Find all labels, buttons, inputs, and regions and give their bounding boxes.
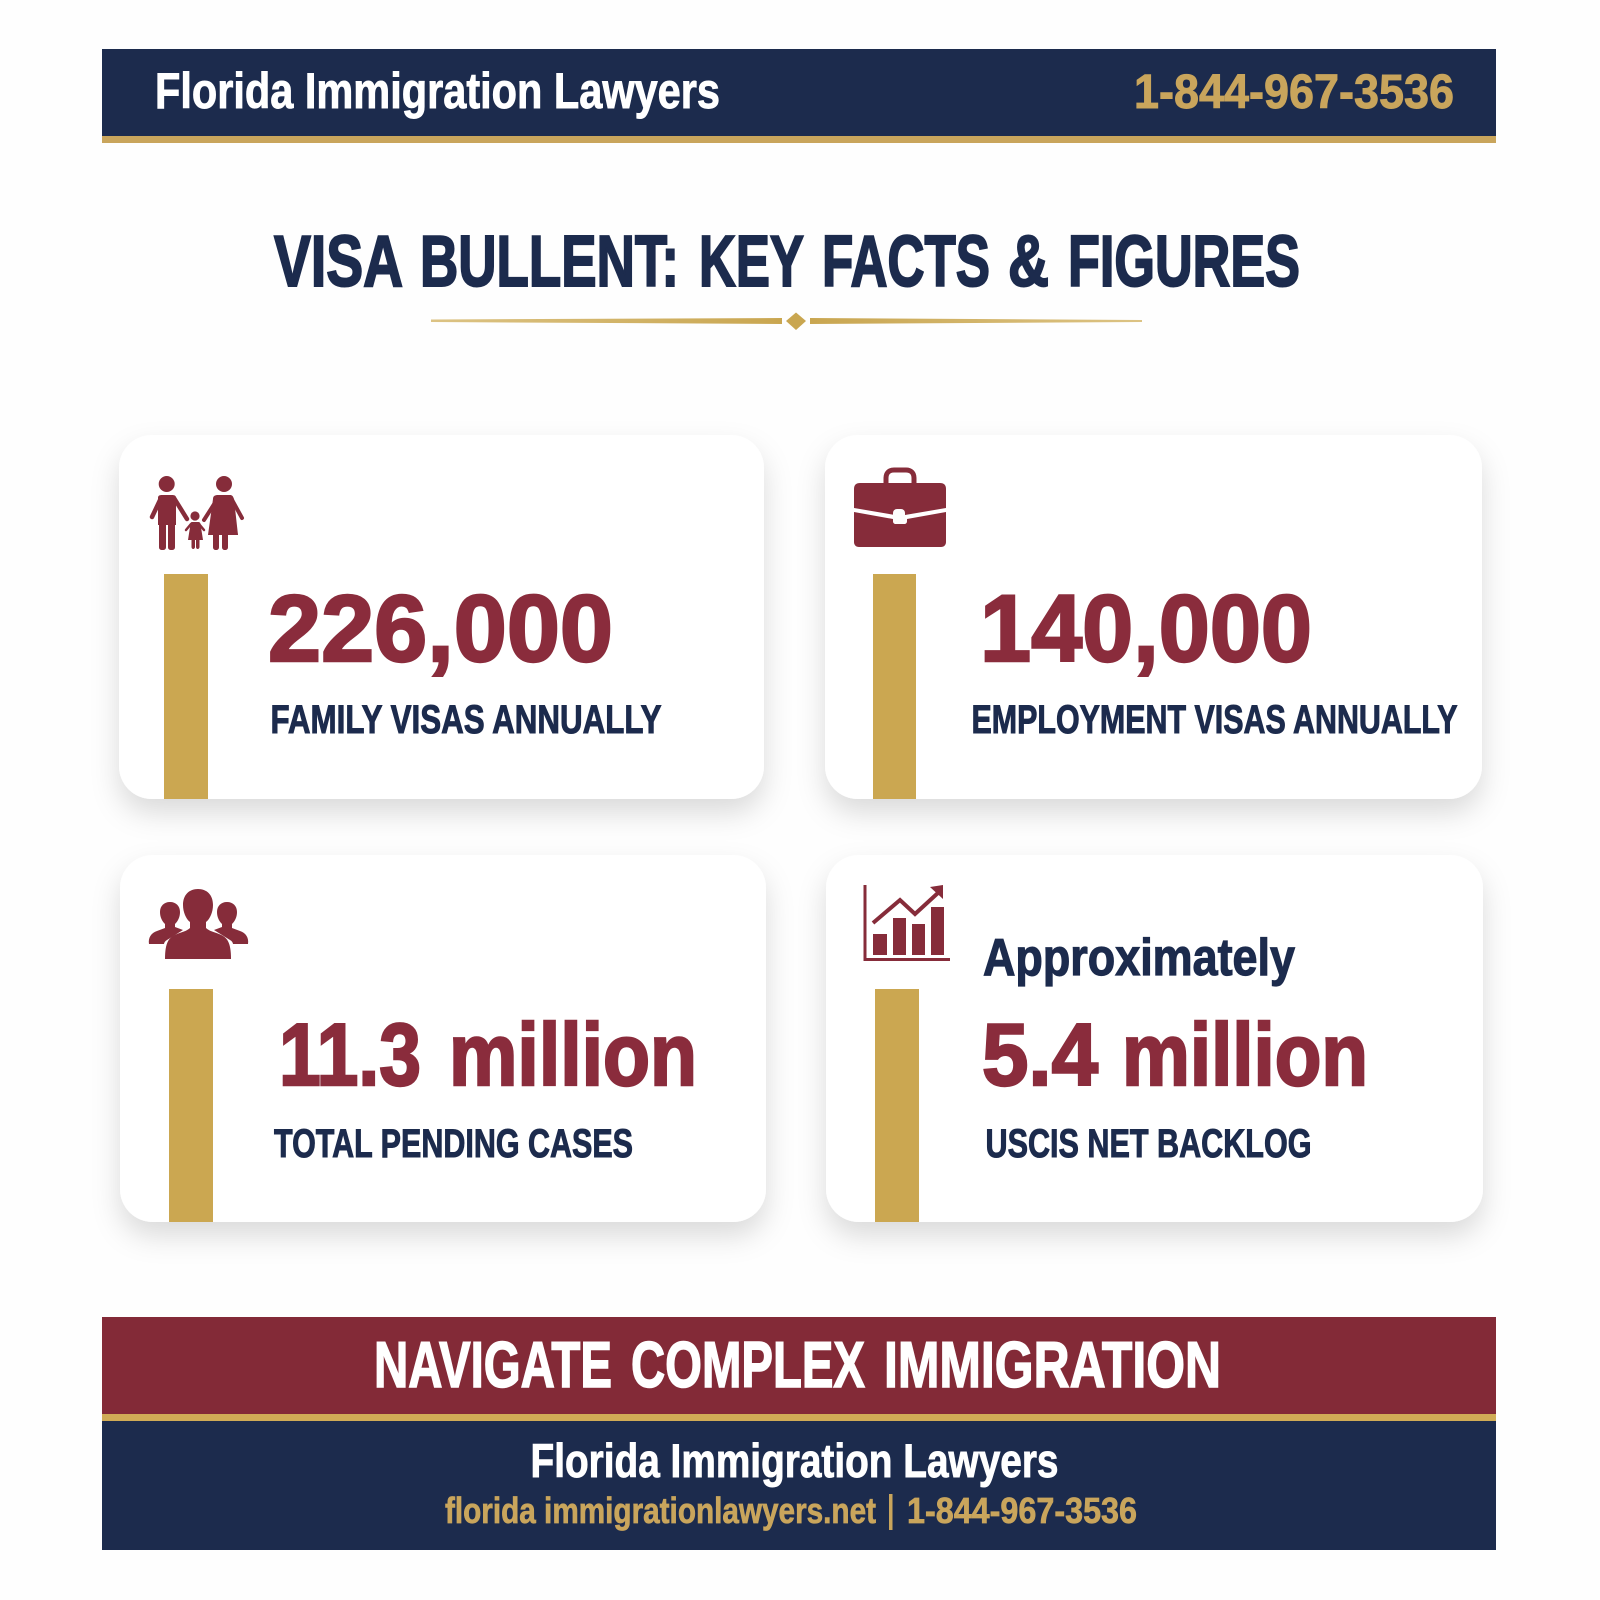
panel: total pending cases bbox=[120, 855, 766, 1222]
icon: family bbox=[152, 476, 242, 550]
card background bbox=[825, 435, 1482, 799]
banner text: IMMIGRATION bbox=[884, 1328, 1221, 1401]
footer gold stripe bbox=[102, 1414, 1496, 1421]
label: uscis net backlog: USCIS NET BACKLOG bbox=[986, 1122, 1312, 1166]
panel: family visas bbox=[119, 435, 764, 799]
header bar bbox=[102, 49, 1496, 143]
title: VISA bbox=[274, 222, 402, 302]
title: BULLENT: bbox=[420, 222, 679, 302]
card background bbox=[120, 855, 766, 1222]
gold accent bar bbox=[169, 989, 213, 1222]
panel: employment visas bbox=[825, 435, 1482, 799]
footer firm name: Florida Immigration Lawyers bbox=[530, 1434, 1058, 1487]
header firm name: Florida Immigration Lawyers bbox=[155, 63, 720, 119]
banner text: NAVIGATE bbox=[374, 1328, 612, 1401]
card background bbox=[119, 435, 764, 799]
qualifier: approximately: Approximately bbox=[983, 929, 1295, 987]
gold accent bar bbox=[875, 989, 919, 1222]
icon: rising bar chart bbox=[865, 885, 950, 960]
card background bbox=[826, 855, 1483, 1222]
stat: 226,000: 226,000 bbox=[268, 576, 613, 682]
stat: 11.3 million: 11.3 bbox=[279, 1005, 421, 1104]
label: total pending cases: TOTAL PENDING CASES bbox=[274, 1122, 633, 1166]
header phone number: 1-844-967-3536 bbox=[1134, 66, 1454, 119]
icon: group of people bbox=[149, 889, 248, 959]
stat: 11.3 million: million bbox=[449, 1005, 697, 1104]
gold accent bar bbox=[164, 574, 208, 799]
title divider with diamond bbox=[431, 312, 1142, 330]
label: employment visas annually: EMPLOYMENT VISAS ANNUALLY bbox=[972, 698, 1458, 742]
label: family visas annually: FAMILY VISAS ANNUALLY bbox=[270, 698, 662, 742]
footer website: florida immigrationlawyers.net bbox=[445, 1490, 876, 1531]
stat: 5.4 million: million bbox=[1122, 1005, 1368, 1104]
panel: uscis net backlog bbox=[826, 855, 1483, 1222]
title: FACTS bbox=[822, 222, 990, 302]
banner text: COMPLEX bbox=[631, 1328, 865, 1401]
footer separator bbox=[889, 1494, 892, 1530]
title: & bbox=[1008, 222, 1049, 302]
footer phone number: 1-844-967-3536 bbox=[907, 1490, 1137, 1531]
stat: 5.4 million: 5.4 bbox=[982, 1005, 1098, 1104]
footer contact panel bbox=[102, 1421, 1496, 1550]
gold accent bar bbox=[873, 574, 916, 799]
title: FIGURES bbox=[1068, 222, 1300, 302]
footer call to action banner bbox=[102, 1317, 1496, 1415]
stat: 140,000: 140,000 bbox=[980, 576, 1312, 682]
title: KEY bbox=[699, 222, 803, 302]
icon: briefcase bbox=[854, 470, 946, 547]
